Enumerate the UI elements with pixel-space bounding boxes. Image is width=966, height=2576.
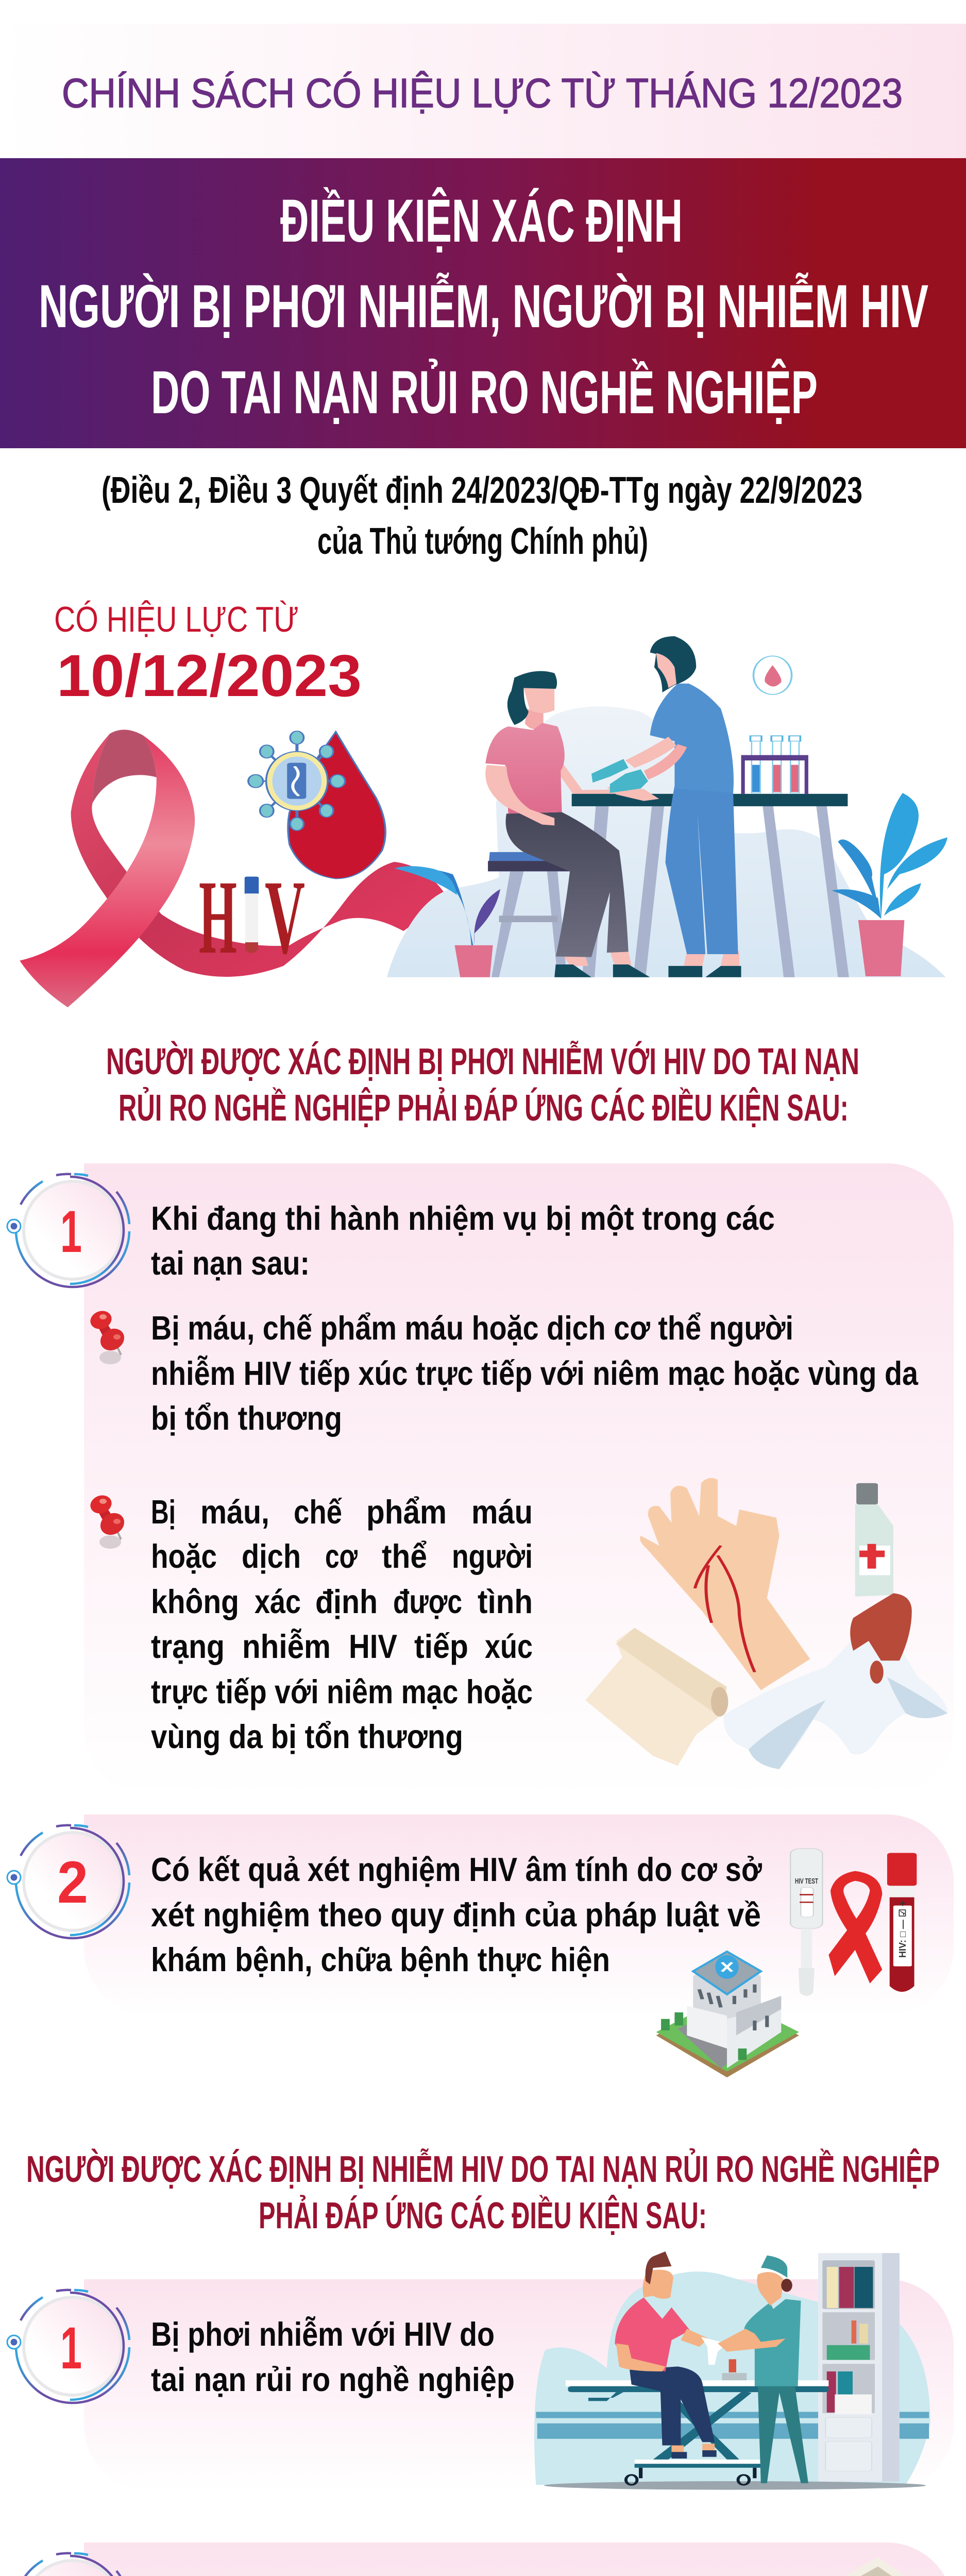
bullet text 2: thể bbox=[382, 1537, 427, 1575]
plant left bbox=[394, 866, 500, 977]
badge 1 bbox=[7, 2290, 129, 2403]
panel: condition 1 bbox=[7, 1163, 954, 1795]
illustration: test kit, ribbon, blood tube, hospital bbox=[656, 1849, 917, 2077]
text: khám bệnh, chữa bệnh thực hiện bbox=[151, 1941, 610, 1978]
top band: policy label bbox=[0, 24, 966, 158]
bullet text 2: trạng bbox=[151, 1628, 225, 1665]
plant right bbox=[832, 793, 947, 976]
bullet text 2: chế bbox=[294, 1493, 343, 1531]
heading: infected conditions: PHẢI ĐÁP ỨNG CÁC ĐIỀU KIỆN SAU: bbox=[259, 2195, 707, 2236]
effective date: 10/12/2023 bbox=[57, 643, 362, 709]
patient bbox=[615, 2251, 727, 2459]
table legs bbox=[582, 806, 849, 977]
bullet text 2: máu bbox=[471, 1493, 533, 1531]
badge 1 bbox=[7, 1174, 129, 1287]
panel: infected condition 2 bbox=[7, 2543, 954, 2576]
bullet text 2: HIV bbox=[349, 1628, 397, 1665]
bullet text 2: dịch bbox=[242, 1537, 301, 1575]
panel: condition 1: 1 bbox=[60, 1199, 82, 1265]
bullet text 2: cơ bbox=[325, 1537, 358, 1575]
bullet text 2 bbox=[151, 1493, 533, 1755]
table top bbox=[572, 794, 848, 806]
badge 2 bbox=[7, 1825, 129, 1938]
bullet text 2: nhiễm bbox=[242, 1628, 331, 1665]
legal source: của Thủ tướng Chính phủ) bbox=[317, 521, 648, 562]
bullet text 2: xúc bbox=[485, 1628, 533, 1665]
HIV letters: V bbox=[265, 859, 305, 976]
bullet text 1: Bị máu, chế phẩm máu hoặc dịch cơ thể người bbox=[151, 1309, 793, 1347]
title band bbox=[0, 158, 966, 448]
nurse bbox=[591, 636, 741, 977]
patient bbox=[485, 671, 659, 977]
bullet text 2: hoặc bbox=[151, 1537, 217, 1575]
kit label: HIV TEST bbox=[795, 1877, 818, 1886]
bullet text 1: bị tổn thương bbox=[151, 1399, 342, 1437]
pin icon bbox=[88, 1308, 128, 1364]
panel: infected condition 1: 1 bbox=[60, 2315, 82, 2381]
intro text: tai nạn sau: bbox=[151, 1244, 310, 1282]
bullet text 2: không bbox=[151, 1583, 239, 1620]
cabinet bbox=[818, 2253, 900, 2482]
bullet text 2: trực tiếp với niêm mạc hoặc bbox=[151, 1673, 533, 1710]
bullet text 2: máu, bbox=[200, 1493, 269, 1531]
heading: exposed conditions bbox=[106, 1041, 859, 1129]
bullet text 2: tiếp bbox=[414, 1628, 468, 1665]
text: Bị phơi nhiễm với HIV do bbox=[151, 2315, 495, 2353]
bullet text 2: Bị bbox=[151, 1493, 176, 1531]
nurse bbox=[718, 2256, 808, 2483]
title line 1: ĐIỀU KIỆN XÁC ĐỊNH bbox=[280, 187, 683, 255]
bullet text 2: phẩm bbox=[366, 1493, 447, 1531]
bullet text 2: định bbox=[315, 1583, 378, 1620]
illustration: wounded hand, bandage, cloth bbox=[585, 1478, 947, 1769]
bullet text 2: xác bbox=[255, 1583, 301, 1620]
illustration: blood test scene bbox=[387, 636, 947, 977]
tube as I bbox=[245, 877, 259, 894]
heading: infected conditions bbox=[26, 2148, 940, 2236]
bullet text 2: được bbox=[393, 1583, 462, 1620]
text: xét nghiệm theo quy định của pháp luật về bbox=[151, 1896, 761, 1934]
intro text bbox=[151, 1199, 775, 1282]
effective date bbox=[54, 599, 362, 709]
effective date: CÓ HIỆU LỰC TỪ bbox=[54, 599, 299, 639]
panel: condition 2: 2 bbox=[57, 1850, 88, 1916]
bed bbox=[566, 2359, 828, 2485]
text: tai nạn rủi ro nghề nghiệp bbox=[151, 2361, 515, 2398]
panel: infected condition 1 bbox=[7, 2251, 954, 2492]
illustration: hospital building bbox=[783, 2557, 937, 2576]
panel: condition 2 bbox=[7, 1815, 954, 2077]
illustration: HIV ribbon and blood drop bbox=[20, 730, 445, 1007]
HIV letters: H bbox=[199, 859, 237, 976]
bullet text 2: tình bbox=[478, 1583, 533, 1620]
badge 2 bbox=[7, 2553, 129, 2576]
pin icon bbox=[88, 1493, 128, 1549]
bullet text 2: vùng da bị tổn thương bbox=[151, 1718, 463, 1755]
label text: CHÍNH SÁCH CÓ HIỆU LỰC TỪ THÁNG 12/2023 bbox=[62, 70, 903, 116]
bullet text 2: người bbox=[452, 1537, 533, 1575]
tube label: HIV: □ — ☑ + bbox=[897, 1901, 908, 1958]
legal source bbox=[101, 470, 862, 562]
text bbox=[151, 1851, 762, 1978]
text bbox=[151, 2315, 515, 2398]
illustration: nurse bandaging patient bbox=[534, 2251, 930, 2490]
stool bbox=[488, 852, 571, 977]
intro text: Khi đang thi hành nhiệm vụ bị một trong các bbox=[151, 1199, 775, 1237]
text: Có kết quả xét nghiệm HIV âm tính do cơ sở bbox=[151, 1851, 762, 1888]
icon: blood drop bbox=[753, 656, 792, 694]
test tubes bbox=[741, 736, 808, 794]
bullet text 1 bbox=[151, 1309, 919, 1437]
